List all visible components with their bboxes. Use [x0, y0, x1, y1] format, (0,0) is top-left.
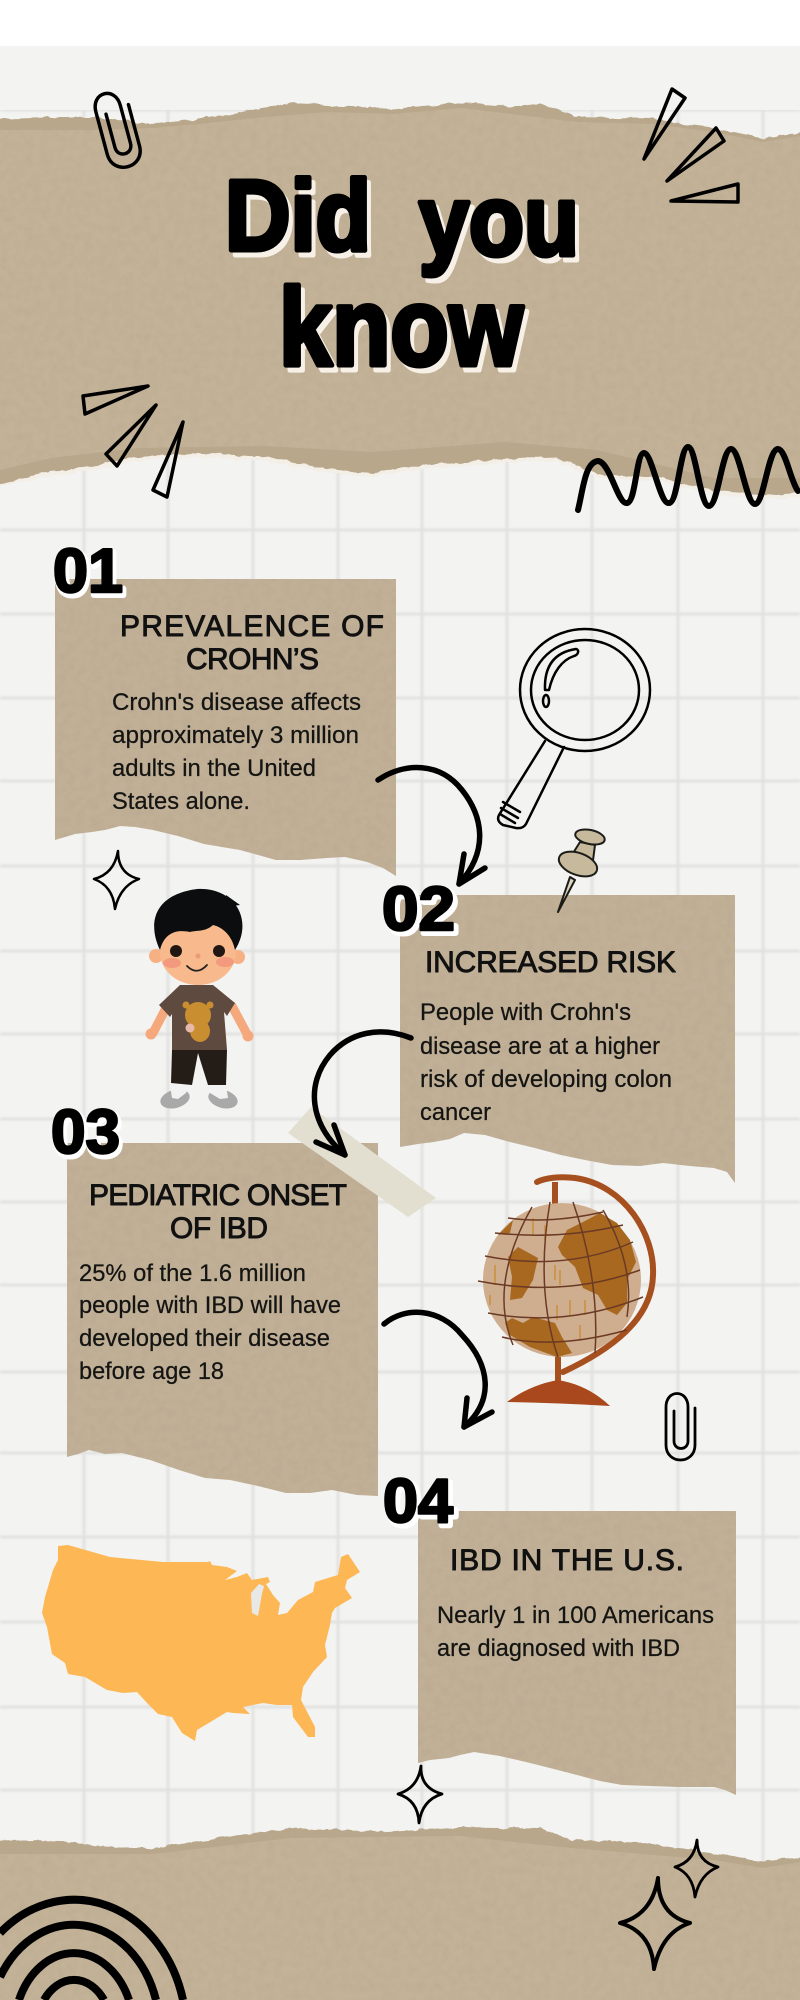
panel: 04 IBD in the U.S.: [383, 1467, 736, 1795]
ears: [149, 949, 163, 963]
body text: approximately 3 million: [112, 722, 359, 749]
grid lines: [478, 1202, 643, 1357]
title: you: [419, 165, 579, 277]
globe base: [507, 1380, 610, 1406]
bear on shirt: [182, 1002, 214, 1042]
icon: burst bottom left: [83, 386, 183, 497]
shirt: [159, 985, 235, 1050]
body text: 25% of the 1.6 million: [79, 1260, 306, 1287]
body text: [79, 1260, 341, 1385]
arrow: 02 to 03: [314, 1032, 411, 1155]
mouth: [187, 965, 207, 971]
body text: People with Crohn's: [420, 999, 631, 1026]
title: Did: [229, 165, 375, 277]
face: [160, 919, 236, 985]
heading: IBD IN THE U.S.: [450, 1544, 684, 1577]
panel: footer torn paper: [0, 1827, 800, 2000]
body text: Crohn's disease affects: [112, 689, 361, 716]
body text: people with IBD will have: [79, 1292, 341, 1319]
number 03: 03: [53, 1101, 122, 1170]
panel background: [418, 1511, 736, 1795]
body text: [420, 999, 672, 1126]
number 04: 04: [383, 1467, 454, 1536]
eyes and cheeks: [170, 945, 182, 957]
panel background: [55, 579, 396, 876]
panel: 02 increased risk: [382, 875, 735, 1183]
title: know: [283, 271, 527, 394]
panel: 01 prevalence: [53, 537, 396, 876]
globe sphere: [483, 1203, 641, 1357]
title: you: [423, 170, 583, 282]
icon: star near panel 04: [398, 1766, 442, 1823]
body text: disease are at a higher: [420, 1033, 660, 1060]
heading: [120, 610, 384, 676]
arms: [146, 1006, 254, 1042]
icon: lower paperclip: [666, 1394, 695, 1460]
icon: tape: [288, 1107, 436, 1217]
body text: [437, 1602, 714, 1662]
icon: burst top right: [644, 89, 738, 202]
icon: star footer small: [675, 1840, 718, 1897]
heading: PREVALENCE OF: [120, 610, 384, 643]
continents: [498, 1213, 636, 1357]
number 04: 04: [386, 1470, 457, 1539]
icon: star left of boy: [94, 851, 139, 909]
panel background: [67, 1143, 378, 1496]
shoes: [158, 1086, 240, 1112]
body text: [112, 689, 361, 815]
body text: are diagnosed with IBD: [437, 1635, 680, 1662]
icon: globe: [478, 1177, 653, 1406]
body text: Nearly 1 in 100 Americans: [437, 1602, 714, 1629]
number 02: 02: [382, 875, 455, 944]
body text: adults in the United: [112, 755, 316, 782]
heading: [89, 1179, 347, 1245]
number 03: 03: [51, 1098, 120, 1167]
number 02: 02: [385, 878, 458, 947]
heading: INCREASED RISK: [425, 946, 676, 979]
icon: zigzag: [578, 447, 798, 510]
globe stand arc: [537, 1177, 653, 1372]
number 01: 01: [55, 540, 125, 609]
heading: OF IBD: [170, 1212, 268, 1245]
body text: developed their disease: [79, 1325, 330, 1352]
title: know: [279, 266, 523, 389]
number 01: 01: [53, 537, 123, 606]
body text: risk of developing colon: [420, 1066, 672, 1093]
icon: push pin: [555, 827, 606, 912]
lake michigan: [251, 1584, 264, 1616]
hair: [154, 889, 242, 950]
brush marks: [490, 1218, 585, 1340]
body text: cancer: [420, 1099, 491, 1126]
title: [225, 160, 583, 394]
heading: CROHN’S: [186, 643, 319, 676]
icon: concentric arches: [0, 1900, 183, 2000]
panel: 03 pediatric onset: [51, 1098, 378, 1496]
body text: before age 18: [79, 1358, 224, 1385]
body text: States alone.: [112, 788, 250, 815]
map: United States: [42, 1545, 360, 1741]
panel: header torn paper: [0, 102, 800, 499]
icon: magnifying glass: [498, 629, 650, 828]
title: Did: [225, 160, 371, 272]
arrow: 01 to 02: [378, 768, 485, 884]
icon: top paperclip: [92, 88, 144, 171]
pants: [171, 1050, 227, 1085]
panel background: [400, 895, 735, 1183]
arrow: 03 to 04: [384, 1312, 492, 1427]
heading: PEDIATRIC ONSET: [89, 1179, 347, 1212]
illustration: boy: [146, 889, 254, 1112]
icon: star footer large: [620, 1878, 690, 1969]
